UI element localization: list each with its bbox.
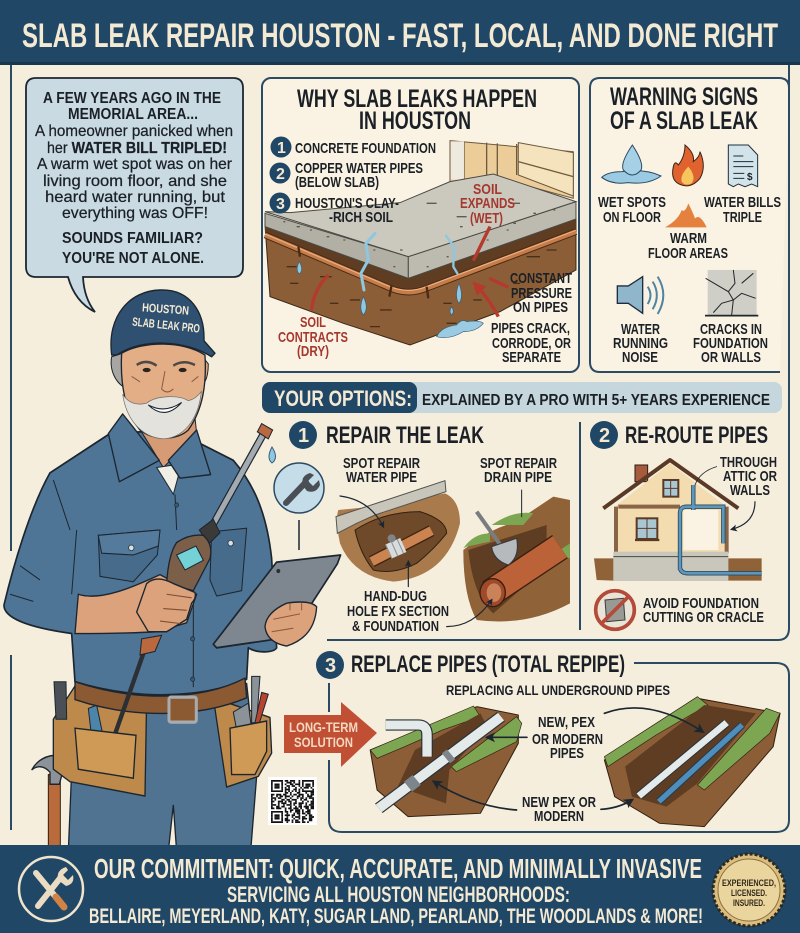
title banner bbox=[0, 0, 800, 65]
numbered legend: (BELOW SLAB) bbox=[295, 174, 379, 191]
labels: SPOT REPAIR bbox=[343, 455, 420, 472]
badge: LICENSED. bbox=[731, 888, 767, 898]
callout: soil contracts: SOIL bbox=[300, 314, 326, 331]
illustration: right trench bbox=[601, 697, 780, 827]
labels: WET SPOTS bbox=[598, 194, 666, 211]
jeans bbox=[68, 684, 257, 851]
tool pouch pocket bbox=[75, 728, 136, 778]
cap bbox=[111, 290, 215, 357]
arrow: long-term solution bbox=[284, 702, 377, 767]
numbered legend: -RICH SOIL bbox=[329, 209, 393, 226]
labels bbox=[343, 455, 557, 635]
cap text: HOUSTON bbox=[142, 300, 189, 318]
icon: water bill bbox=[728, 145, 758, 187]
numbered legend: 3 bbox=[276, 196, 285, 213]
icon: water bill: $ bbox=[747, 172, 753, 183]
callout: pipes crack: SEPARATE bbox=[502, 349, 561, 366]
icon: flame bbox=[673, 145, 703, 186]
heading: WHY SLAB LEAKS HAPPEN bbox=[297, 85, 537, 113]
labels: TRIPLE bbox=[723, 209, 762, 226]
labels: ON FLOOR bbox=[603, 209, 661, 226]
labels: OR MODERN bbox=[532, 731, 603, 748]
badge: EXPERIENCED, bbox=[722, 878, 776, 888]
illustration: house bbox=[594, 460, 762, 581]
labels: FLOOR AREAS bbox=[648, 245, 728, 262]
callout: pipes crack bbox=[491, 320, 571, 366]
labels: WARM bbox=[670, 230, 707, 247]
subheading: REPLACING ALL UNDERGROUND PIPES bbox=[446, 682, 670, 698]
callout: constant pressure: ON PIPES bbox=[513, 299, 568, 316]
heading: 3 bbox=[325, 655, 336, 677]
labels: THROUGH bbox=[720, 454, 777, 471]
heading: 2 bbox=[599, 425, 610, 447]
speech bubble: everything was OFF! bbox=[62, 205, 208, 222]
icon: no cutting bbox=[596, 591, 634, 629]
speech bubble: her WATER BILL TRIPLED! bbox=[47, 140, 227, 157]
shirt bbox=[4, 430, 277, 695]
labels: WATER bbox=[621, 321, 660, 338]
speech bubble: A warm wet spot was on her bbox=[37, 156, 233, 173]
labels: MODERN bbox=[534, 808, 584, 825]
numbered legend bbox=[270, 136, 436, 226]
caption: CUTTING OR CRACLE bbox=[643, 609, 764, 626]
technician figure bbox=[4, 290, 341, 853]
callout: pipes crack: PIPES CRACK, bbox=[491, 320, 570, 337]
heading: REPAIR THE LEAK bbox=[326, 422, 484, 449]
illustration: water pipe repair bbox=[336, 481, 460, 587]
labels: NEW, PEX bbox=[538, 714, 595, 731]
tool belt back bbox=[53, 676, 272, 796]
callout: soil expands bbox=[460, 181, 515, 227]
numbered legend: COPPER WATER PIPES bbox=[295, 160, 423, 177]
option 1: repair the leak bbox=[289, 421, 570, 635]
options banner bbox=[262, 382, 782, 413]
panel: why slab leaks happen bbox=[262, 78, 579, 372]
callout: soil expands: (WET) bbox=[470, 210, 503, 227]
neck and collar bbox=[108, 401, 211, 494]
option 3: replace pipes bbox=[284, 651, 789, 832]
labels: HAND-DUG bbox=[364, 588, 427, 605]
speech bubble: MEMORIAL AREA... bbox=[68, 106, 198, 123]
callout: constant pressure: PRESSURE bbox=[511, 285, 572, 302]
speech bubble: YOU'RE NOT ALONE. bbox=[62, 250, 204, 267]
commitment text: SERVICING ALL HOUSTON NEIGHBORHOODS: bbox=[227, 882, 570, 907]
cap text: SLAB LEAK PRO bbox=[132, 315, 201, 336]
speech bubble: heard water running, but bbox=[45, 189, 226, 206]
illustration: left trench bbox=[370, 706, 527, 817]
speech bubble bbox=[26, 78, 243, 312]
numbered legend: HOUSTON'S CLAY- bbox=[295, 195, 399, 212]
heading bbox=[297, 85, 537, 135]
labels: NOISE bbox=[622, 349, 658, 366]
caption bbox=[643, 595, 764, 626]
heading: 1 bbox=[298, 425, 309, 447]
callout: constant pressure: CONSTANT bbox=[510, 270, 572, 287]
head bbox=[111, 344, 208, 439]
callout: soil contracts bbox=[278, 314, 348, 360]
labels: PIPES bbox=[550, 745, 584, 762]
icon: wet spots bbox=[602, 145, 661, 183]
labels bbox=[522, 714, 603, 825]
labels bbox=[720, 454, 777, 499]
labels: CRACKS IN bbox=[700, 321, 762, 338]
heading bbox=[610, 83, 758, 135]
commitment text bbox=[89, 853, 703, 928]
icon: cracks bbox=[705, 270, 758, 316]
labels: SPOT REPAIR bbox=[480, 455, 557, 472]
icon: warm floor bbox=[665, 203, 707, 227]
callout: constant pressure bbox=[510, 270, 572, 316]
labels: WATER PIPE bbox=[346, 469, 417, 486]
labels: WALLS bbox=[730, 482, 770, 499]
labels: DRAIN PIPE bbox=[484, 469, 552, 486]
tablet bbox=[213, 555, 341, 648]
forearm bbox=[75, 575, 197, 634]
footer banner bbox=[0, 845, 800, 933]
callout: soil contracts: (DRY) bbox=[297, 343, 329, 360]
labels: RUNNING bbox=[613, 335, 668, 352]
labels: FOUNDATION bbox=[693, 335, 768, 352]
labels bbox=[598, 194, 781, 366]
callout: soil contracts: CONTRACTS bbox=[278, 329, 348, 346]
callout: soil expands: SOIL bbox=[473, 181, 502, 198]
labels: HOLE FX SECTION bbox=[347, 603, 449, 620]
cap text bbox=[132, 300, 201, 336]
labels: NEW PEX OR bbox=[522, 794, 596, 811]
callout: pipes crack: CORRODE, OR bbox=[492, 335, 571, 352]
heading: REPLACE PIPES (TOTAL REPIPE) bbox=[351, 651, 625, 678]
leak detector bbox=[137, 424, 273, 655]
heading bbox=[316, 651, 625, 679]
option 2: re-route pipes bbox=[590, 421, 777, 629]
labels: OR WALLS bbox=[701, 349, 761, 366]
speech bubble: A homeowner panicked when bbox=[35, 123, 233, 140]
QR code bbox=[268, 777, 317, 825]
options banner: YOUR OPTIONS: bbox=[274, 386, 412, 411]
slab illustration bbox=[265, 141, 576, 345]
caption: AVOID FOUNDATION bbox=[643, 595, 759, 612]
heading bbox=[590, 421, 768, 449]
panel: warning signs bbox=[590, 78, 789, 372]
labels: ATTIC OR bbox=[723, 468, 777, 485]
cable bbox=[113, 644, 147, 739]
numbered legend: CONCRETE FOUNDATION bbox=[295, 140, 436, 157]
labels: & FOUNDATION bbox=[352, 618, 439, 635]
speech bubble: SOUNDS FAMILIAR? bbox=[62, 230, 203, 247]
numbered legend: 2 bbox=[276, 166, 285, 183]
icon: crossed tools bbox=[19, 857, 83, 921]
callout: soil expands: EXPANDS bbox=[460, 195, 515, 212]
badge bbox=[713, 854, 785, 926]
speech bubble: living room floor, and she bbox=[43, 173, 227, 190]
arrow: long-term solution: SOLUTION bbox=[294, 734, 353, 750]
arrow: long-term solution: LONG-TERM bbox=[289, 719, 358, 735]
illustration: drain pipe repair bbox=[447, 490, 570, 627]
heading bbox=[289, 421, 484, 449]
icon: wrench badge bbox=[269, 447, 324, 550]
numbered legend: 1 bbox=[277, 140, 286, 157]
heading: IN HOUSTON bbox=[359, 107, 471, 135]
icon: speaker bbox=[617, 277, 663, 314]
badge: INSURED. bbox=[733, 898, 765, 908]
speech bubble: A FEW YEARS AGO IN THE bbox=[43, 90, 221, 107]
hammer bbox=[32, 755, 77, 853]
